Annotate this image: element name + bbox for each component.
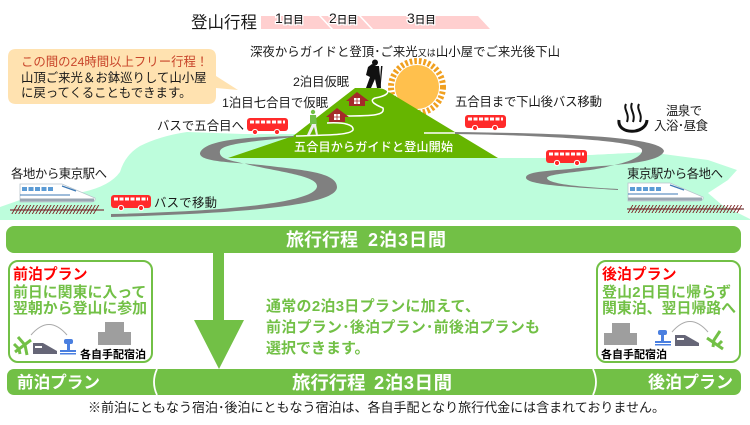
icon: rails right xyxy=(627,208,744,210)
panel: post-night plan: 登山2日目に帰らず xyxy=(602,284,731,301)
icon: hut 2nd night xyxy=(346,92,369,106)
footnote: ※前泊にともなう宿泊･後泊にともなう宿泊は、各自手配となり旅行代金には含まれておりません。 xyxy=(88,400,665,415)
top itinerary bar xyxy=(6,226,741,253)
route labels: バスで移動 xyxy=(154,196,217,210)
mountain trail xyxy=(296,87,455,136)
description: 選択できます。 xyxy=(266,340,370,357)
callout: free itinerary: に戻ってくることもできます。 xyxy=(21,86,192,100)
schedule day band: 2日目 xyxy=(329,10,358,26)
description xyxy=(266,298,540,357)
icon: airport tower xyxy=(655,330,671,346)
route labels: 東京駅から各地へ xyxy=(627,166,723,181)
icon: rails left xyxy=(10,208,104,211)
schedule day band xyxy=(261,10,490,30)
icon: train small xyxy=(675,335,699,346)
panel: pre-night plan: 前泊プラン xyxy=(13,265,87,283)
icon: bus descending xyxy=(465,115,506,131)
route labels: 各地から東京駅へ xyxy=(11,166,107,181)
icon: bullet train right xyxy=(628,183,703,201)
white area right of mountain xyxy=(455,125,660,158)
panel: post-night plan: 各自手配宿泊 xyxy=(601,347,667,361)
icon: plane xyxy=(707,331,723,349)
mountain xyxy=(228,88,498,158)
description: 前泊プラン･後泊プラン･前後泊プランも xyxy=(266,318,540,336)
icon: bus return xyxy=(546,150,587,166)
top itinerary bar: 旅行行程 xyxy=(286,230,358,250)
schedule day band: 3日目 xyxy=(407,10,436,26)
icon: lodging xyxy=(604,323,637,345)
road: outbound xyxy=(111,136,337,217)
route labels: 1泊目七合目で仮眠 xyxy=(222,96,329,110)
icon: bus transfer xyxy=(111,195,151,211)
panel: pre-night plan: 各自手配宿泊 xyxy=(80,347,146,361)
schedule day band: 1日目 xyxy=(275,10,304,26)
icon: climber on slope xyxy=(307,110,318,135)
icon: hot spring xyxy=(619,103,647,131)
panel: pre-night plan xyxy=(9,261,152,362)
route arc xyxy=(31,324,67,335)
mountain label: 五合目からガイドと登山開始 xyxy=(294,139,453,154)
description: 通常の2泊3日プランに加えて、 xyxy=(266,298,480,315)
icon: train small xyxy=(33,343,57,354)
arrow xyxy=(194,253,244,369)
bottom plan bar: 後泊プラン xyxy=(648,372,733,392)
panel: pre-night plan: 翌朝から登山に参加 xyxy=(13,299,147,317)
bottom plan bar: 前泊プラン xyxy=(17,373,100,392)
road: return xyxy=(455,132,664,190)
icon: bullet train left xyxy=(20,184,95,202)
schedule heading: 登山行程 xyxy=(191,13,257,32)
bottom plan bar xyxy=(7,369,741,395)
icon: sun xyxy=(391,61,443,113)
route labels: バスで五合目へ xyxy=(157,119,244,133)
bottom plan bar: 旅行行程 xyxy=(292,372,366,393)
route labels: 五合目まで下山後バス移動 xyxy=(455,95,602,109)
route labels xyxy=(11,44,723,210)
land xyxy=(0,132,750,220)
icon: bus to fifth station xyxy=(247,118,288,135)
route arc xyxy=(672,322,708,332)
icon: climber at summit xyxy=(366,60,382,88)
icon: lodging xyxy=(98,322,131,345)
bottom plan bar: 2泊3日間 xyxy=(374,372,452,393)
icon: hut 1st night xyxy=(326,108,349,122)
panel: pre-night plan: 前日に関東に入って xyxy=(13,283,146,301)
top itinerary bar: 2泊3日間 xyxy=(368,230,446,250)
icon: airport tower xyxy=(60,339,76,354)
panel: post-night plan: 関東泊、翌日帰路へ xyxy=(602,299,736,317)
callout: free itinerary: 山頂ご来光＆お鉢巡りして山小屋 xyxy=(21,70,206,85)
route labels: 入浴･昼食 xyxy=(654,119,708,133)
icon: plane xyxy=(14,337,31,355)
route labels: 2泊目仮眠 xyxy=(293,75,350,89)
route labels: 温泉で xyxy=(666,103,702,118)
route labels: 深夜からガイドと登頂･ご来光又は山小屋でご来光後下山 xyxy=(250,44,560,59)
callout: free itinerary: この間の24時間以上フリー行程！ xyxy=(21,54,208,69)
panel: post-night plan xyxy=(597,261,740,362)
panel: post-night plan: 後泊プラン xyxy=(602,265,676,283)
callout: free itinerary xyxy=(8,49,238,104)
